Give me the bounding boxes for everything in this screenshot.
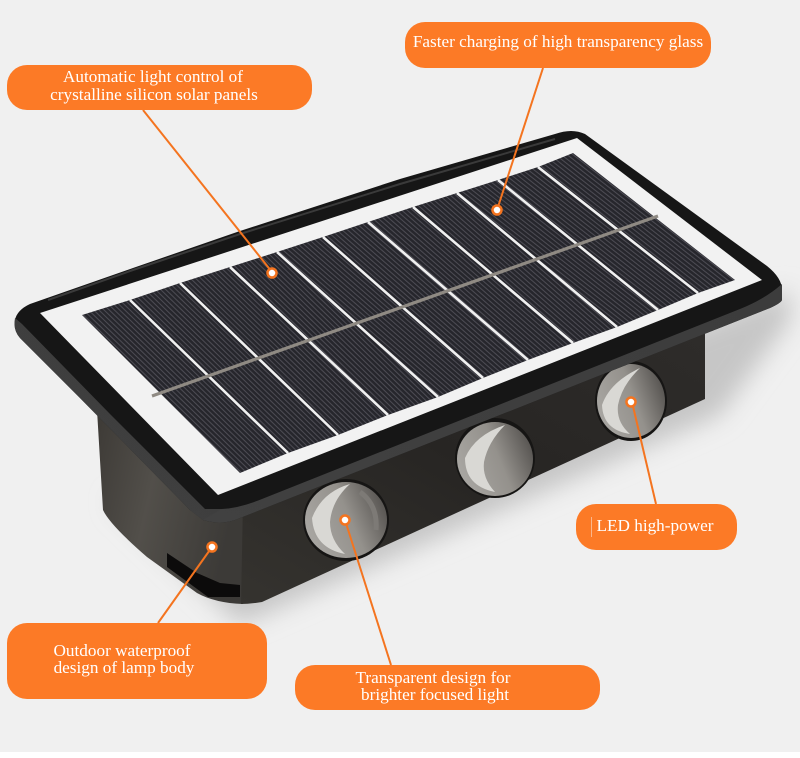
callout: solar panels: crystalline silicon solar panels — [50, 85, 258, 104]
side notch — [167, 553, 240, 597]
solar cells — [82, 153, 735, 473]
callout leader: solar panels — [143, 110, 276, 278]
callout leader: glass — [492, 68, 543, 214]
frame lower lip — [15, 284, 782, 522]
callout: body: Outdoor waterproof — [54, 641, 191, 660]
callout: lens: Transparent design for — [356, 668, 511, 687]
soft shadow under lamp — [110, 290, 790, 625]
callout: body: design of lamp body — [54, 658, 195, 677]
callout: solar panels: Automatic light control of — [63, 67, 243, 86]
callout: LED: LED high-power — [597, 516, 714, 535]
callout leader: lens — [340, 516, 391, 665]
callout: LED — [576, 504, 737, 550]
cell column group — [82, 153, 735, 473]
callout: lens: brighter focused light — [361, 685, 509, 704]
white cell dividers — [130, 167, 698, 453]
callout: glass: Faster charging of high transparency glass — [413, 32, 703, 51]
lens 2 — [455, 418, 535, 498]
callout leader: body — [158, 542, 216, 623]
lamp body left face — [97, 410, 243, 604]
lens 1 — [303, 479, 389, 561]
callout: glass — [405, 22, 711, 68]
callout leader: LED — [626, 398, 656, 504]
lamp top frame — [15, 131, 782, 522]
frame top highlight — [48, 139, 555, 300]
solar panel glass — [40, 138, 762, 495]
callout: body — [7, 623, 267, 699]
lamp body front face — [241, 330, 705, 604]
solar lamp — [15, 131, 782, 604]
centre bus bar — [152, 216, 658, 396]
callout: lens — [295, 665, 600, 710]
lens 3 — [595, 361, 667, 441]
callout: solar panels — [7, 65, 312, 110]
